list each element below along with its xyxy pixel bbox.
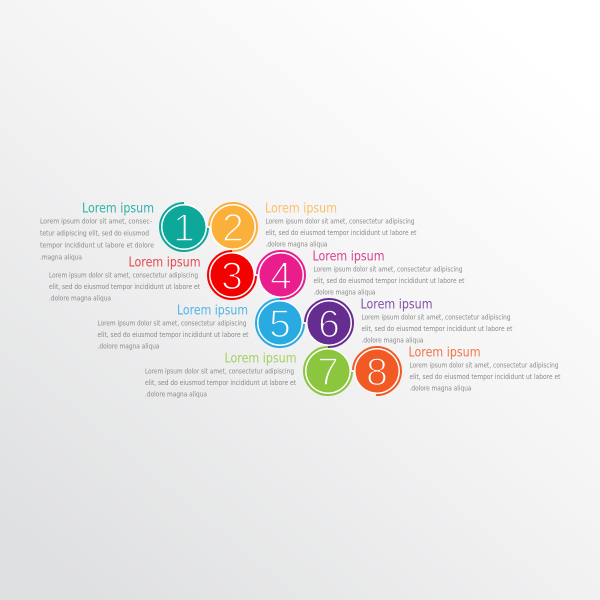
badge 6 — [305, 299, 353, 347]
body 3: .dolore magna aliqua — [49, 294, 111, 302]
body 7 — [145, 366, 296, 398]
body 5 — [98, 318, 249, 350]
body 7: .dolore magna aliqua — [145, 390, 207, 398]
heading 4: Lorem ipsum — [312, 248, 384, 264]
badge 3 — [208, 251, 256, 299]
body 8 — [410, 360, 561, 392]
body 5: elit, sed do eiusmod tempor incididunt ut labore et — [98, 330, 249, 339]
heading 6: Lorem ipsum — [360, 296, 432, 312]
body 1: Lorem ipsum dolor sit amet, consec- — [40, 216, 152, 226]
badge 5 — [256, 299, 304, 347]
heading 3: Lorem ipsum — [128, 254, 200, 270]
body 6 — [362, 312, 513, 344]
badge 3: 3 — [221, 255, 243, 298]
step 5 text — [98, 302, 249, 350]
badge 8 — [353, 347, 401, 395]
body 2: .dolore magna aliqua — [266, 240, 328, 248]
step 3 text — [49, 254, 200, 302]
badge 4: 4 — [270, 255, 292, 298]
badge 1: 1 — [173, 207, 195, 250]
body 3: elit, sed do eiusmod tempor incididunt ut labore et — [49, 282, 200, 291]
body 5: Lorem ipsum dolor sit amet, consectetur adipiscing — [98, 318, 246, 328]
badge 7 — [304, 347, 352, 395]
body 3: Lorem ipsum dolor sit amet, consectetur adipiscing — [49, 270, 198, 280]
body 4 — [314, 264, 465, 296]
step 4 text — [312, 248, 465, 296]
heading 1: Lorem ipsum — [82, 200, 154, 216]
body 5: .dolore magna aliqua — [98, 342, 160, 350]
badge 7: 7 — [317, 351, 339, 394]
body 2 — [266, 216, 417, 248]
step 6 text — [360, 296, 513, 344]
body 7: elit, sed do eiusmod tempor incididunt ut labore et — [145, 378, 296, 387]
body 7: Lorem ipsum dolor sit amet, consectetur adipiscing — [145, 366, 294, 376]
badge 2: 2 — [222, 207, 244, 250]
heading 7: Lorem ipsum — [224, 350, 296, 366]
step 8 text — [408, 344, 561, 392]
body 1: tetur adipiscing elit, sed do eiusmod — [40, 228, 149, 238]
badge 2 — [209, 203, 257, 251]
step 2 text — [265, 200, 417, 248]
body 4: elit, sed do eiusmod tempor incididunt ut labore et — [314, 276, 465, 285]
body 4: Lorem ipsum dolor sit amet, consectetur adipiscing — [314, 264, 462, 274]
body 2: Lorem ipsum dolor sit amet, consectetur adipiscing — [266, 216, 414, 226]
body 2: elit, sed do eiusmod tempor incididunt ut labore et — [266, 228, 417, 237]
step 7 text — [145, 350, 296, 398]
body 1: tempor incididunt ut labore et dolore — [40, 240, 154, 250]
body 6: Lorem ipsum dolor sit amet, consectetur adipiscing — [362, 312, 510, 322]
body 8: .dolore magna aliqua — [410, 384, 472, 392]
heading 5: Lorem ipsum — [177, 302, 248, 318]
body 4: .dolore magna aliqua — [314, 288, 376, 296]
step 1 text — [40, 200, 154, 262]
body 1: .magna aliqua — [40, 252, 82, 262]
body 8: Lorem ipsum dolor sit amet, consectetur adipiscing — [410, 360, 558, 370]
badge 8: 8 — [366, 351, 388, 394]
body 6: .dolore magna aliqua — [362, 336, 424, 344]
heading 8: Lorem ipsum — [408, 344, 480, 360]
badge 6: 6 — [318, 303, 340, 346]
body 6: elit, sed do eiusmod tempor incididunt ut labore et — [362, 324, 513, 333]
body 1 — [40, 216, 154, 262]
badge 4 — [257, 251, 305, 299]
body 8: elit, sed do eiusmod tempor incididunt ut labore et — [410, 372, 561, 381]
body 3 — [49, 270, 200, 302]
badge 1 — [160, 203, 208, 251]
heading 2: Lorem ipsum — [265, 200, 337, 216]
badge 5: 5 — [269, 303, 291, 346]
